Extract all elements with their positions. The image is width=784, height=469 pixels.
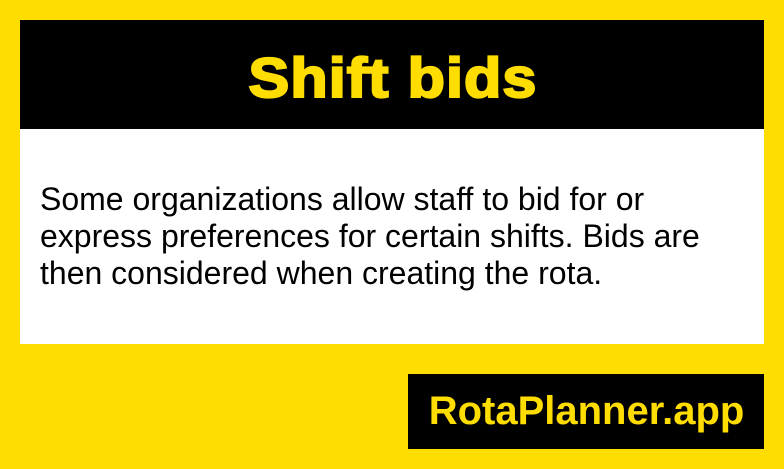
brand badge [408, 374, 764, 449]
title: Shift bids [249, 46, 537, 109]
brand name: RotaPlanner.app [429, 389, 744, 433]
panel: description [20, 129, 764, 344]
description text: express preferences for certain shifts. Bids are [40, 218, 700, 254]
description text: Some organizations allow staff to bid for or [40, 181, 644, 217]
title banner [20, 20, 764, 129]
description text [40, 181, 700, 291]
description text: then considered when creating the rota. [40, 255, 602, 291]
